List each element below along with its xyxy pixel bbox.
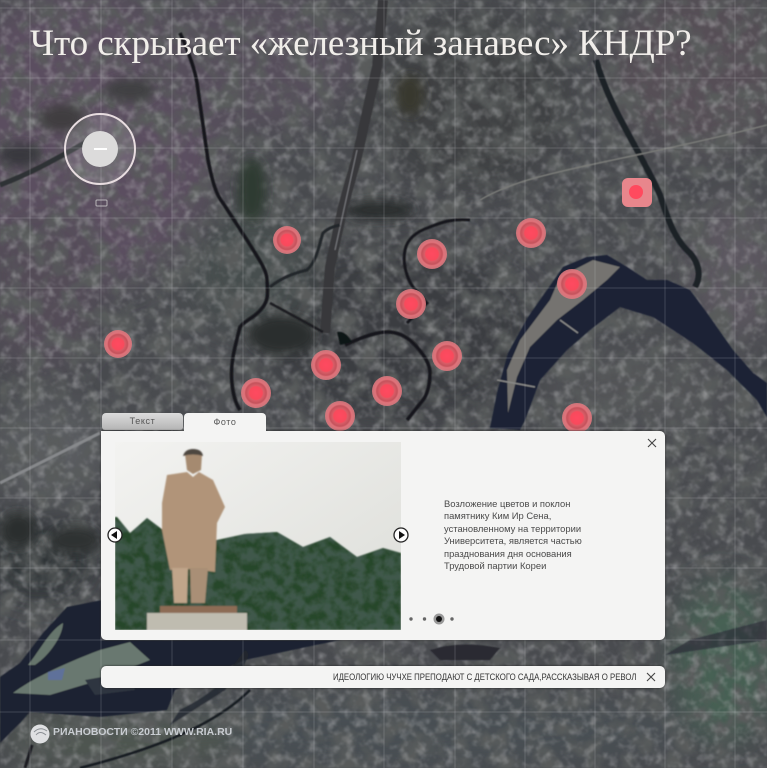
description text: Трудовой партии Кореи (444, 560, 546, 571)
description text: празднования дня основания (444, 548, 572, 559)
title: Что скрывает «железный занавес» КНДР? (30, 23, 692, 64)
news ticker bar (101, 666, 665, 688)
dark vegetation patches (0, 75, 424, 554)
next arrow (394, 528, 408, 542)
lower-left river (0, 600, 340, 743)
logo: RIA Novosti: РИАНОВОСТИ ©2011 WWW.RIA.RU (53, 726, 232, 738)
previous arrow (108, 528, 122, 542)
description text: Возложение цветов и поклон (444, 498, 570, 509)
info panel (101, 431, 665, 640)
tab: text: Текст (130, 416, 155, 426)
tab: photo (184, 413, 266, 432)
description text: Университета, является частью (444, 535, 582, 546)
close icon (648, 439, 656, 447)
tab: photo: Фото (213, 417, 237, 427)
statue (162, 472, 225, 572)
photo of the monument (115, 442, 401, 630)
ticker close icon (646, 672, 656, 682)
description text (444, 498, 582, 571)
zoom control (65, 114, 135, 206)
tab: text (102, 413, 183, 430)
pagination dots (409, 614, 454, 624)
gallery controls (107, 438, 656, 624)
logo: RIA Novosti (30, 724, 232, 744)
description text: памятнику Ким Ир Сена, (444, 510, 551, 521)
description text: установленному на территории (444, 523, 581, 534)
map markers (104, 178, 652, 433)
ticker text: ИДЕОЛОГИЮ ЧУЧХЕ ПРЕПОДАЮТ С ДЕТСКОГО САДА,РАССКАЗЫВАЯ О РЕВОЛ (333, 672, 636, 682)
